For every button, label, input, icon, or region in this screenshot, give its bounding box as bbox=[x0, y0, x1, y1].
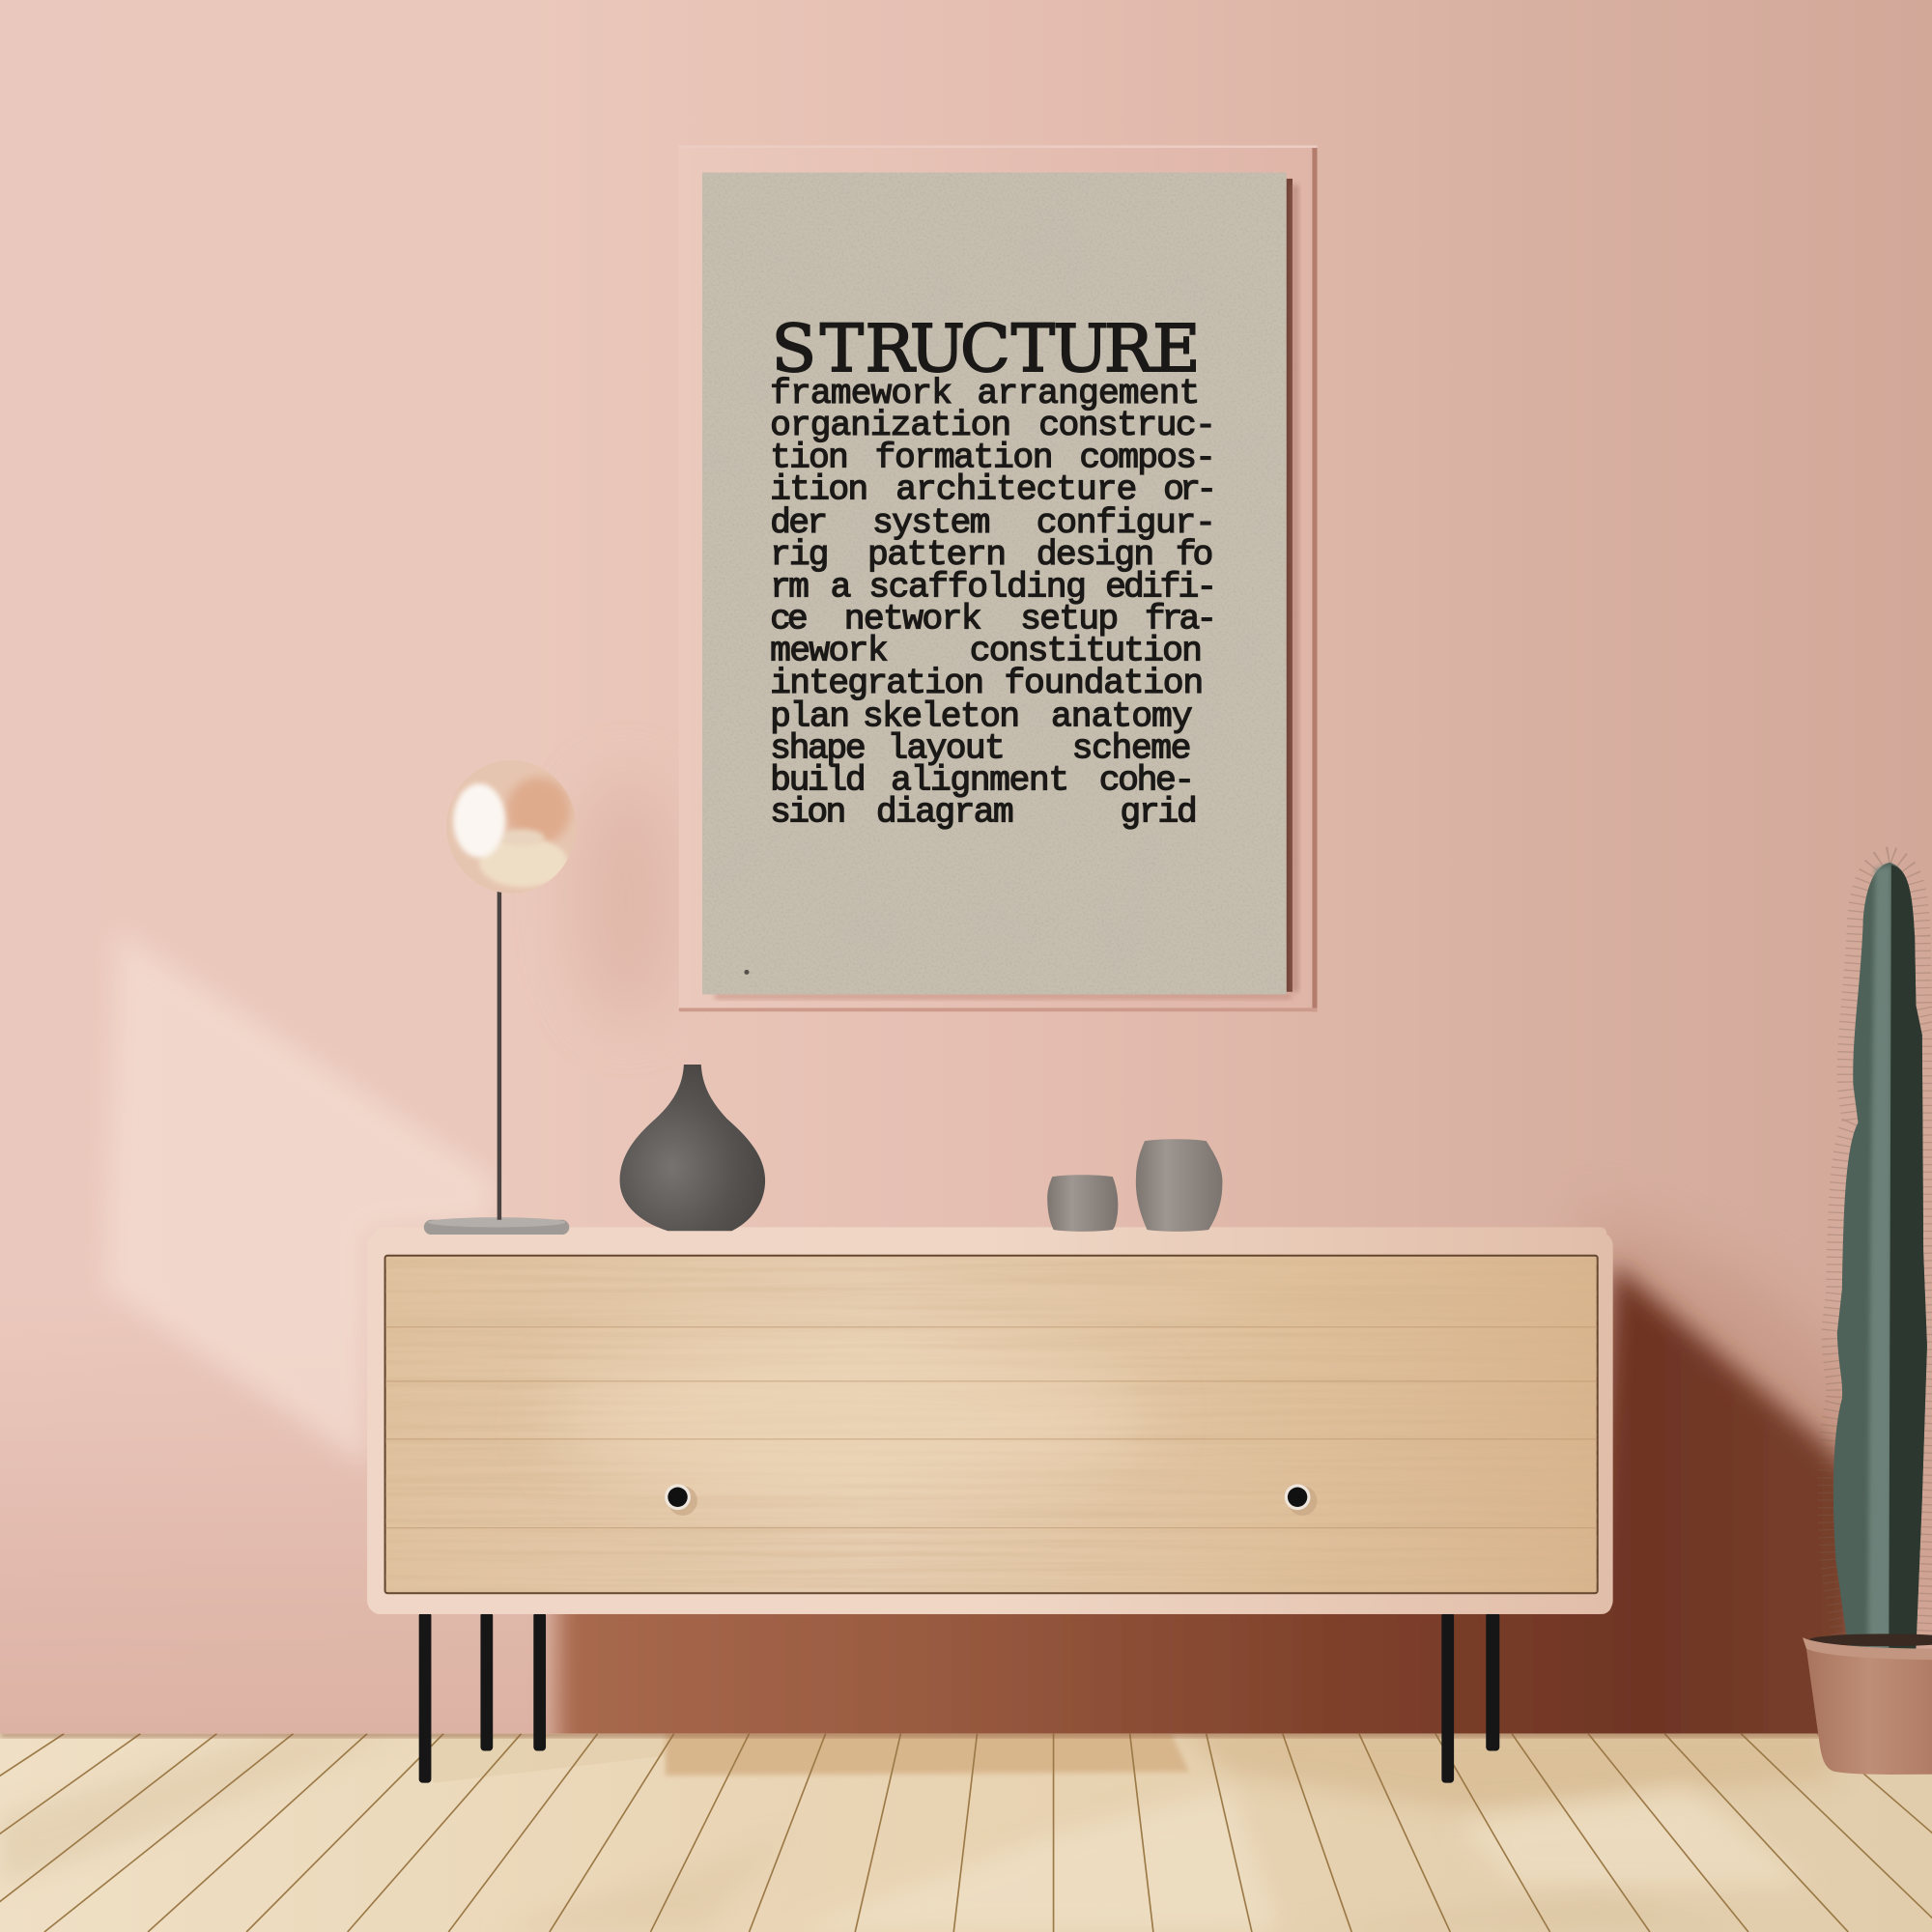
cactus plant bbox=[1833, 863, 1927, 1649]
poster title: STRUCTURE bbox=[772, 310, 1201, 386]
floor lamp bbox=[424, 759, 577, 1235]
poster body text: ition bbox=[770, 470, 868, 510]
poster body text: rig bbox=[770, 535, 829, 575]
poster body text: diagram bbox=[876, 793, 1014, 833]
poster body text: scheme bbox=[1072, 728, 1191, 768]
poster body text: mework bbox=[770, 632, 889, 671]
lamp base bbox=[424, 1217, 569, 1235]
poster body text: sion bbox=[770, 793, 846, 833]
poster body text: system bbox=[872, 503, 991, 543]
tall grey cup bbox=[1136, 1139, 1222, 1232]
sunlight patch on wall bbox=[104, 930, 493, 1466]
dresser cabinet bbox=[367, 1227, 1613, 1614]
dresser legs bbox=[419, 1611, 1499, 1783]
poster drop shadow bbox=[715, 179, 1298, 999]
poster body text: fra- bbox=[1145, 600, 1217, 639]
drawer knob right bbox=[1285, 1484, 1318, 1516]
poster body text: tion bbox=[770, 438, 849, 477]
terracotta pot bbox=[1803, 1634, 1932, 1775]
poster body text: edifi- bbox=[1105, 567, 1217, 607]
poster body text: shape bbox=[770, 728, 867, 768]
poster body text bbox=[770, 374, 1217, 833]
poster body text: pattern bbox=[867, 535, 1007, 575]
small grey cup bbox=[1047, 1175, 1118, 1232]
poster body text: scaffolding bbox=[868, 567, 1087, 607]
poster body text: skeleton bbox=[863, 696, 1020, 736]
poster body text: foundation bbox=[1005, 664, 1204, 703]
poster body text: network bbox=[844, 600, 982, 639]
poster body text: construc- bbox=[1038, 406, 1216, 445]
poster body text: a bbox=[831, 567, 852, 607]
cactus shaded side bbox=[1889, 865, 1927, 1649]
poster body text: organization bbox=[770, 406, 1011, 445]
poster frame panel bbox=[679, 146, 1318, 1011]
cactus body bbox=[1833, 863, 1927, 1649]
poster body text: build bbox=[770, 761, 867, 801]
poster body text: framework bbox=[770, 374, 952, 413]
floor bbox=[0, 1725, 1932, 1932]
poster body text: plan bbox=[770, 696, 850, 736]
poster body text: design bbox=[1037, 535, 1154, 575]
poster body text: architecture bbox=[895, 470, 1137, 510]
dresser shadow on wall bbox=[557, 1208, 1897, 1786]
poster body text: cohe- bbox=[1099, 761, 1195, 801]
poster body text: formation bbox=[875, 438, 1054, 477]
poster: paper sheet bbox=[702, 173, 1287, 994]
dresser top surface bbox=[375, 1227, 1606, 1256]
poster body text: configur- bbox=[1037, 503, 1216, 543]
poster body text: rm bbox=[770, 567, 810, 607]
poster body text: arrangement bbox=[977, 374, 1200, 413]
poster body text: fo bbox=[1176, 535, 1213, 575]
poster body text: ce bbox=[770, 600, 809, 639]
poster body text: constitution bbox=[970, 632, 1203, 671]
lamp shadow on wall bbox=[574, 777, 678, 1023]
poster body text: setup bbox=[1020, 600, 1119, 639]
large dark vase bbox=[620, 1065, 765, 1231]
poster body text: der bbox=[770, 503, 828, 543]
poster body text: or- bbox=[1163, 470, 1217, 510]
drawer front bbox=[385, 1256, 1598, 1593]
lamp rod bbox=[497, 890, 501, 1220]
poster body text: layout bbox=[887, 728, 1006, 768]
cactus highlight bbox=[1868, 865, 1891, 1649]
cactus spines bbox=[1833, 863, 1927, 1645]
lamp globe bbox=[446, 759, 577, 895]
poster body text: integration bbox=[770, 664, 984, 703]
poster body text: alignment bbox=[891, 761, 1069, 801]
poster body text: anatomy bbox=[1051, 696, 1193, 736]
poster body text: compos- bbox=[1079, 438, 1216, 477]
poster body text: grid bbox=[1120, 793, 1198, 833]
dresser bottom rail bbox=[370, 1595, 1611, 1614]
drawer knob left bbox=[665, 1484, 697, 1516]
